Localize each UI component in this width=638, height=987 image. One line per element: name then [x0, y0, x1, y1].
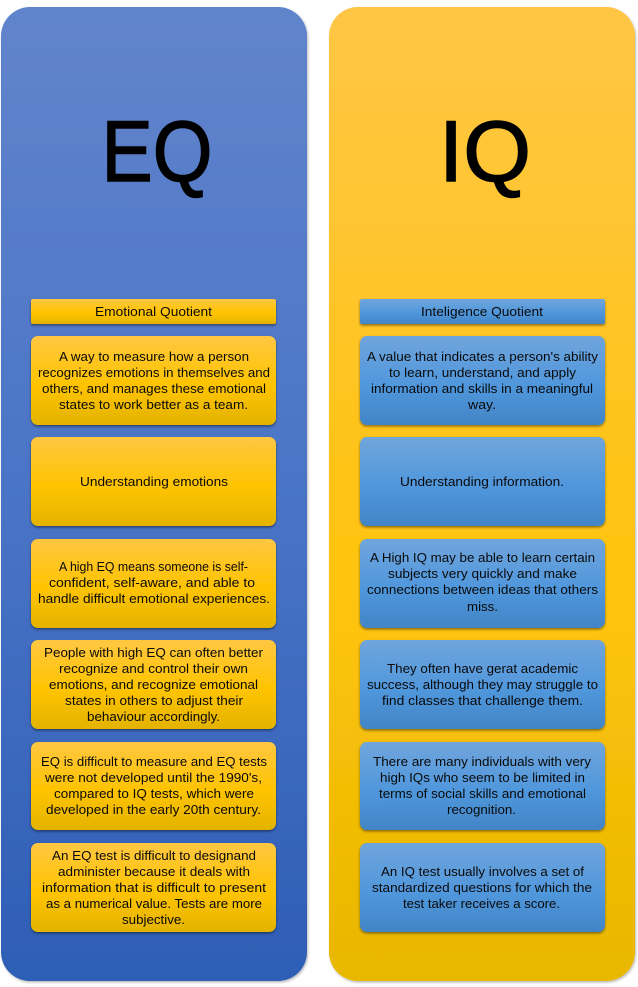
IQ definition box: [360, 336, 605, 425]
EQ high score meaning box: confident, self-aware, and able to: [49, 576, 255, 590]
EQ history box: were not developed until the 1990's,: [44, 771, 262, 785]
IQ social limits box: There are many individuals with very: [373, 755, 592, 769]
EQ definition box: recognizes emotions in themselves and: [38, 366, 270, 380]
EQ abilities box: emotions, and recognize emotional: [49, 678, 258, 692]
IQ test box: [360, 843, 605, 932]
EQ history box: developed in the early 20th century.: [46, 803, 261, 817]
heading: Inteligence Quotient: [360, 299, 605, 324]
IQ focus box: Understanding information.: [400, 475, 564, 489]
IQ high score meaning box: miss.: [467, 600, 498, 614]
IQ test box: test taker receives a score.: [403, 897, 560, 911]
EQ focus box: [31, 437, 276, 526]
IQ definition box: way.: [467, 398, 496, 412]
IQ test box: An IQ test usually involves a set of: [381, 865, 585, 879]
EQ high score meaning box: [31, 539, 276, 628]
EQ test box: [31, 843, 276, 932]
EQ high score meaning box: handle difficult emotional experiences.: [38, 592, 270, 606]
panel: EQ: [1, 7, 307, 981]
IQ academic success box: success, although they may struggle to: [367, 678, 598, 692]
EQ test box: as a numerical value. Tests are more: [46, 897, 262, 911]
EQ definition box: [31, 336, 276, 425]
EQ history box: EQ is difficult to measure and EQ tests: [41, 755, 267, 769]
heading: Inteligence Quotient: Inteligence Quotient: [421, 305, 544, 319]
IQ academic success box: [360, 640, 605, 729]
IQ high score meaning box: A High IQ may be able to learn certain: [370, 551, 595, 565]
EQ high score meaning box: A high EQ means someone is self-: [59, 560, 248, 574]
EQ abilities box: behaviour accordingly.: [87, 710, 220, 724]
IQ high score meaning box: subjects very quickly and make: [388, 567, 577, 581]
EQ focus box: Understanding emotions: [80, 475, 228, 489]
IQ social limits box: high IQs who seem to be limited in: [380, 771, 585, 785]
EQ definition box: states to work better as a team.: [59, 398, 248, 412]
EQ definition box: others, and manages these emotional: [42, 382, 266, 396]
IQ definition box: A value that indicates a person's ability: [367, 350, 599, 364]
IQ academic success box: find classes that challenge them.: [382, 694, 583, 708]
heading: Emotional Quotient: [31, 299, 276, 324]
EQ test box: An EQ test is difficult to designand: [52, 849, 256, 863]
IQ social limits box: [360, 742, 605, 830]
EQ abilities box: states in others to adjust their: [65, 694, 243, 708]
IQ social limits box: recognition.: [447, 803, 516, 817]
title: EQ: EQ: [102, 104, 212, 200]
IQ academic success box: They often have gerat academic: [387, 662, 578, 676]
IQ high score meaning box: [360, 539, 605, 628]
EQ history box: compared to IQ tests, which were: [54, 787, 254, 801]
EQ abilities box: recognize and control their own: [59, 662, 248, 676]
EQ history box: [31, 742, 276, 830]
heading: Emotional Quotient: Emotional Quotient: [95, 305, 213, 319]
EQ definition box: A way to measure how a person: [59, 350, 249, 364]
EQ test box: administer because it deals with: [58, 865, 250, 879]
IQ test box: standardized questions for which the: [372, 881, 592, 895]
IQ focus box: [360, 437, 605, 526]
EQ test box: information that is difficult to present: [42, 881, 267, 895]
IQ definition box: to learn, understand, and apply: [389, 366, 577, 380]
EQ abilities box: People with high EQ can often better: [44, 646, 263, 660]
IQ high score meaning box: connections between ideas that others: [367, 583, 598, 597]
EQ abilities box: [31, 640, 276, 729]
title: IQ: IQ: [439, 104, 531, 200]
IQ social limits box: terms of social skills and emotional: [379, 787, 586, 801]
panel: IQ: [329, 7, 635, 981]
EQ test box: subjective.: [122, 913, 185, 927]
IQ definition box: information and skills in a meaningful: [371, 382, 593, 396]
